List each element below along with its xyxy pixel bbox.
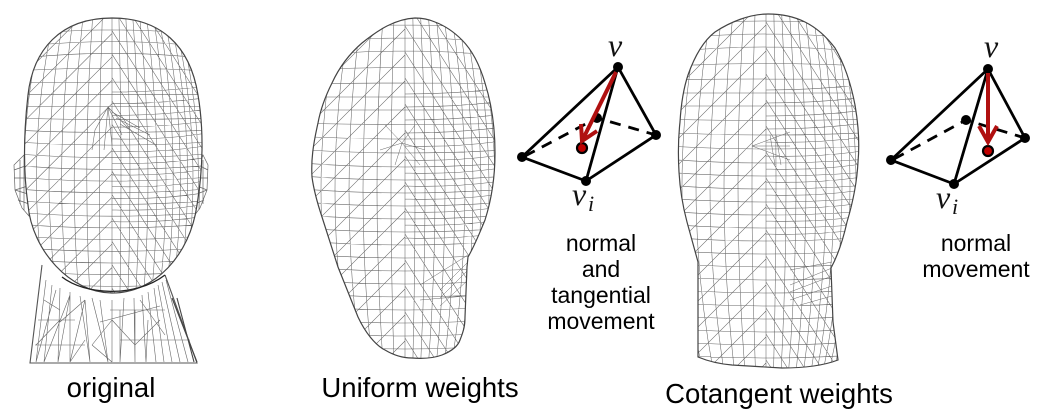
- ear right: [194, 155, 208, 216]
- mesh convergence: [380, 125, 468, 306]
- chin shadow: [62, 275, 165, 291]
- face surface: [25, 18, 202, 292]
- caption: original: original: [67, 372, 155, 403]
- label v: v: [984, 28, 999, 64]
- label vi: [572, 176, 594, 216]
- mesh convergence: [752, 132, 832, 305]
- caption: normal and tangential movement: normal: [566, 230, 636, 256]
- label vi: i: [952, 194, 958, 219]
- head outline: [25, 18, 202, 293]
- diagram: normal and tangential movement: [517, 27, 661, 216]
- vertices: [886, 64, 1030, 189]
- caption: normal and tangential movement: movement: [547, 308, 655, 334]
- red target point: [577, 143, 587, 153]
- tetrahedron edges: [522, 67, 656, 181]
- head outline: [678, 14, 859, 368]
- label vi: v: [572, 176, 587, 212]
- head mesh: original: [8, 11, 216, 363]
- diagram: normal movement: [886, 28, 1030, 219]
- red target point: [983, 146, 993, 156]
- red arrow: [581, 72, 616, 141]
- neck mesh: [30, 265, 197, 363]
- nose dent: [92, 107, 156, 150]
- caption: uniform weights: Uniform weights: [321, 372, 519, 403]
- label v: v: [608, 27, 623, 63]
- head mesh: uniform weights: [311, 17, 496, 359]
- head mesh: cotangent weights: [678, 13, 860, 369]
- ear left: [14, 155, 29, 216]
- label vi: v: [936, 179, 951, 215]
- caption: normal movement: movement: [922, 256, 1030, 282]
- label vi: [936, 179, 958, 219]
- label vi: i: [588, 191, 594, 216]
- head outline: [312, 18, 495, 358]
- caption: normal movement: normal: [941, 230, 1011, 256]
- caption: normal and tangential movement: tangential: [551, 282, 651, 308]
- red arrow: [979, 73, 997, 142]
- vertices: [517, 62, 661, 186]
- caption: normal and tangential movement: and: [582, 256, 620, 282]
- caption: cotangent weights: Cotangent weights: [665, 378, 893, 409]
- tetrahedron edges: [891, 69, 1025, 184]
